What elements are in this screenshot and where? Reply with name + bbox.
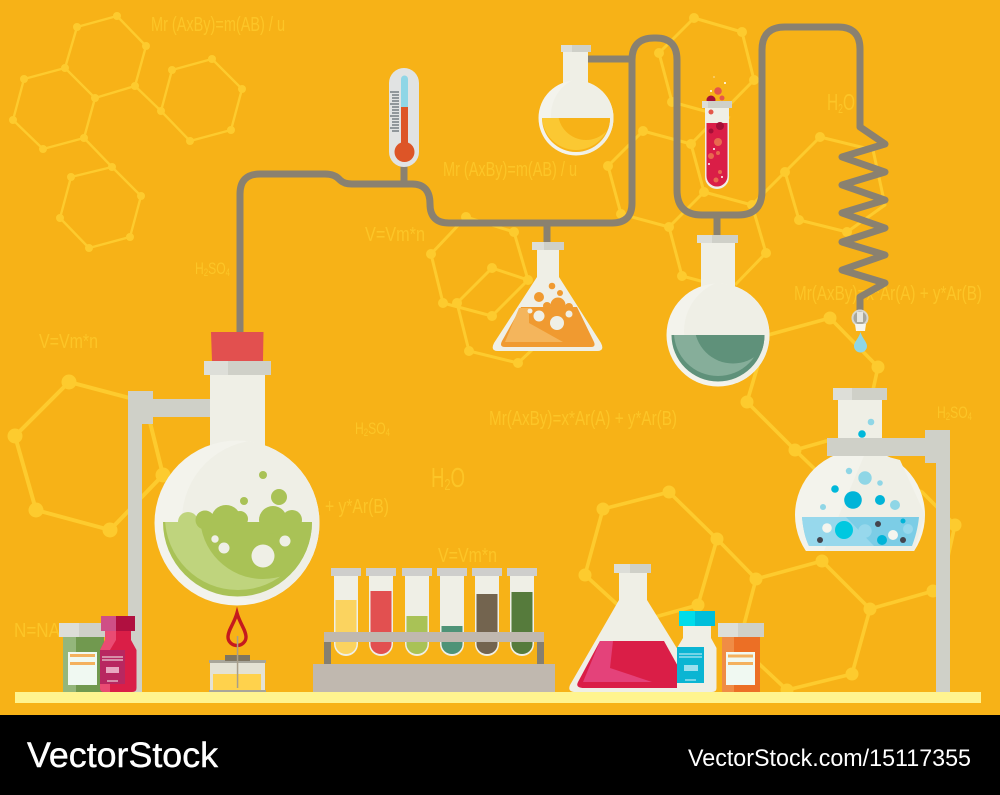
foam bbox=[178, 512, 198, 532]
formula: relative mass top: Mr (AxBy)=m(AB) / u bbox=[151, 14, 285, 36]
rising bubbles bbox=[706, 76, 726, 104]
formula: sulfuric acid right: SO bbox=[950, 403, 968, 422]
formula: sulfuric acid left: 2 bbox=[204, 267, 208, 279]
chemical formulas in background bbox=[14, 14, 982, 642]
scale ticks bbox=[390, 92, 399, 131]
formula: sulfuric acid centre: SO bbox=[368, 419, 386, 438]
spirit burner bbox=[209, 613, 266, 692]
round flask blue bbox=[795, 388, 925, 551]
liquid bbox=[800, 517, 922, 547]
formula: sulfuric acid left: SO bbox=[208, 259, 226, 278]
round flask green bbox=[666, 235, 770, 386]
thermometer bbox=[389, 68, 419, 167]
liquid bbox=[706, 123, 728, 187]
mercury column bbox=[401, 76, 408, 107]
tube: red bbox=[366, 568, 396, 656]
formula: avogadro: N=NA bbox=[14, 620, 61, 642]
molecule: left pentagon bbox=[8, 374, 170, 538]
coil nozzle and drop bbox=[852, 310, 868, 352]
test tube rack bbox=[313, 568, 555, 692]
formula: sulfuric acid centre: 4 bbox=[386, 427, 390, 439]
formula: volume left: V=Vm*n bbox=[39, 331, 98, 353]
glass body bbox=[210, 662, 265, 692]
formula: sulfuric acid left: 4 bbox=[226, 267, 230, 279]
conical flask orange bbox=[493, 242, 602, 351]
cap bbox=[532, 242, 564, 250]
formula: volume lower: V=Vm*n bbox=[438, 545, 497, 567]
green bottle bbox=[59, 623, 106, 692]
liquid bbox=[577, 641, 690, 688]
large round flask green bbox=[154, 332, 320, 606]
label bbox=[100, 650, 125, 684]
formula: sulfuric acid centre: 2 bbox=[364, 427, 368, 439]
formula: sulfuric acid right: H bbox=[937, 403, 949, 422]
formula: water top right: O bbox=[843, 89, 855, 115]
round flask top bbox=[538, 45, 614, 156]
formula: volume top: V=Vm*n bbox=[365, 224, 425, 246]
tube: yellow bbox=[331, 568, 361, 656]
label bbox=[677, 647, 704, 683]
image reference url: VectorStock.com/15117355 bbox=[688, 745, 971, 772]
red bottle bbox=[100, 616, 136, 692]
label bbox=[726, 652, 755, 685]
formula: water centre: O bbox=[450, 462, 465, 493]
tube stub: top flask bbox=[588, 56, 632, 62]
water drop bbox=[854, 332, 867, 352]
liquid bbox=[542, 118, 610, 152]
bubbles in liquid bbox=[810, 518, 913, 545]
tube: brown bbox=[472, 568, 502, 656]
liquid bbox=[501, 307, 595, 347]
molecule: lower right cluster bbox=[578, 312, 962, 696]
formula: sulfuric acid left: H bbox=[195, 259, 207, 278]
molecule: upper right cluster bbox=[603, 13, 885, 285]
tube: green bbox=[402, 568, 432, 656]
tube: teal bbox=[437, 568, 467, 656]
flame bbox=[228, 613, 246, 646]
formula: water top right: 2 bbox=[838, 101, 843, 116]
rack base bbox=[313, 664, 555, 692]
orange bottle bbox=[718, 623, 764, 692]
bubbles above liquid bbox=[820, 419, 900, 510]
rack top bar bbox=[324, 632, 544, 642]
liquid bbox=[672, 335, 764, 382]
collar bbox=[204, 361, 271, 375]
formula: molar mass centre: Mr(AxBy)=x*Ar(A) + y*Ar(B) bbox=[489, 408, 677, 430]
formula: water centre: 2 bbox=[445, 477, 451, 494]
tube: dark green bbox=[507, 568, 537, 656]
test tube hanging bbox=[702, 76, 732, 189]
formula: water top right: H bbox=[827, 89, 844, 115]
wick bbox=[225, 655, 250, 661]
cap bbox=[561, 45, 591, 52]
label bbox=[68, 652, 97, 685]
footer band bbox=[0, 715, 1000, 795]
foam and bubbles bbox=[196, 471, 302, 535]
right stand bbox=[925, 430, 950, 692]
formula: fragment beside flask: + y*Ar(B) bbox=[325, 496, 389, 518]
cap bbox=[697, 235, 738, 243]
red stopper bbox=[211, 332, 264, 361]
liquid bbox=[163, 522, 312, 596]
brand name: VectorStock bbox=[27, 736, 219, 775]
formula: sulfuric acid right: 4 bbox=[968, 411, 972, 423]
molecule: centre cluster bbox=[426, 212, 548, 368]
connecting gas tube with coil bbox=[240, 27, 885, 335]
tube stub: conical flask bbox=[544, 223, 550, 244]
formula: water centre: H bbox=[431, 462, 451, 493]
conical flask red bbox=[569, 564, 704, 692]
formula: relative mass middle: Mr (AxBy)=m(AB) / u bbox=[443, 159, 577, 181]
cap bbox=[614, 564, 651, 573]
cap bbox=[702, 101, 732, 108]
cap bbox=[833, 388, 887, 400]
formula: sulfuric acid right: 2 bbox=[946, 411, 950, 423]
table shelf bbox=[15, 692, 981, 703]
tube stub: thermometer bbox=[400, 164, 408, 184]
formula: sulfuric acid centre: H bbox=[355, 419, 367, 438]
left stand bbox=[128, 391, 211, 692]
tube stub: green flask bbox=[714, 215, 720, 238]
blue bottle bbox=[677, 611, 716, 692]
rack legs bbox=[324, 642, 544, 664]
foam and bubbles bbox=[534, 283, 573, 312]
right stand arm bbox=[827, 438, 937, 456]
molecule: top-left hexagons bbox=[9, 12, 246, 252]
